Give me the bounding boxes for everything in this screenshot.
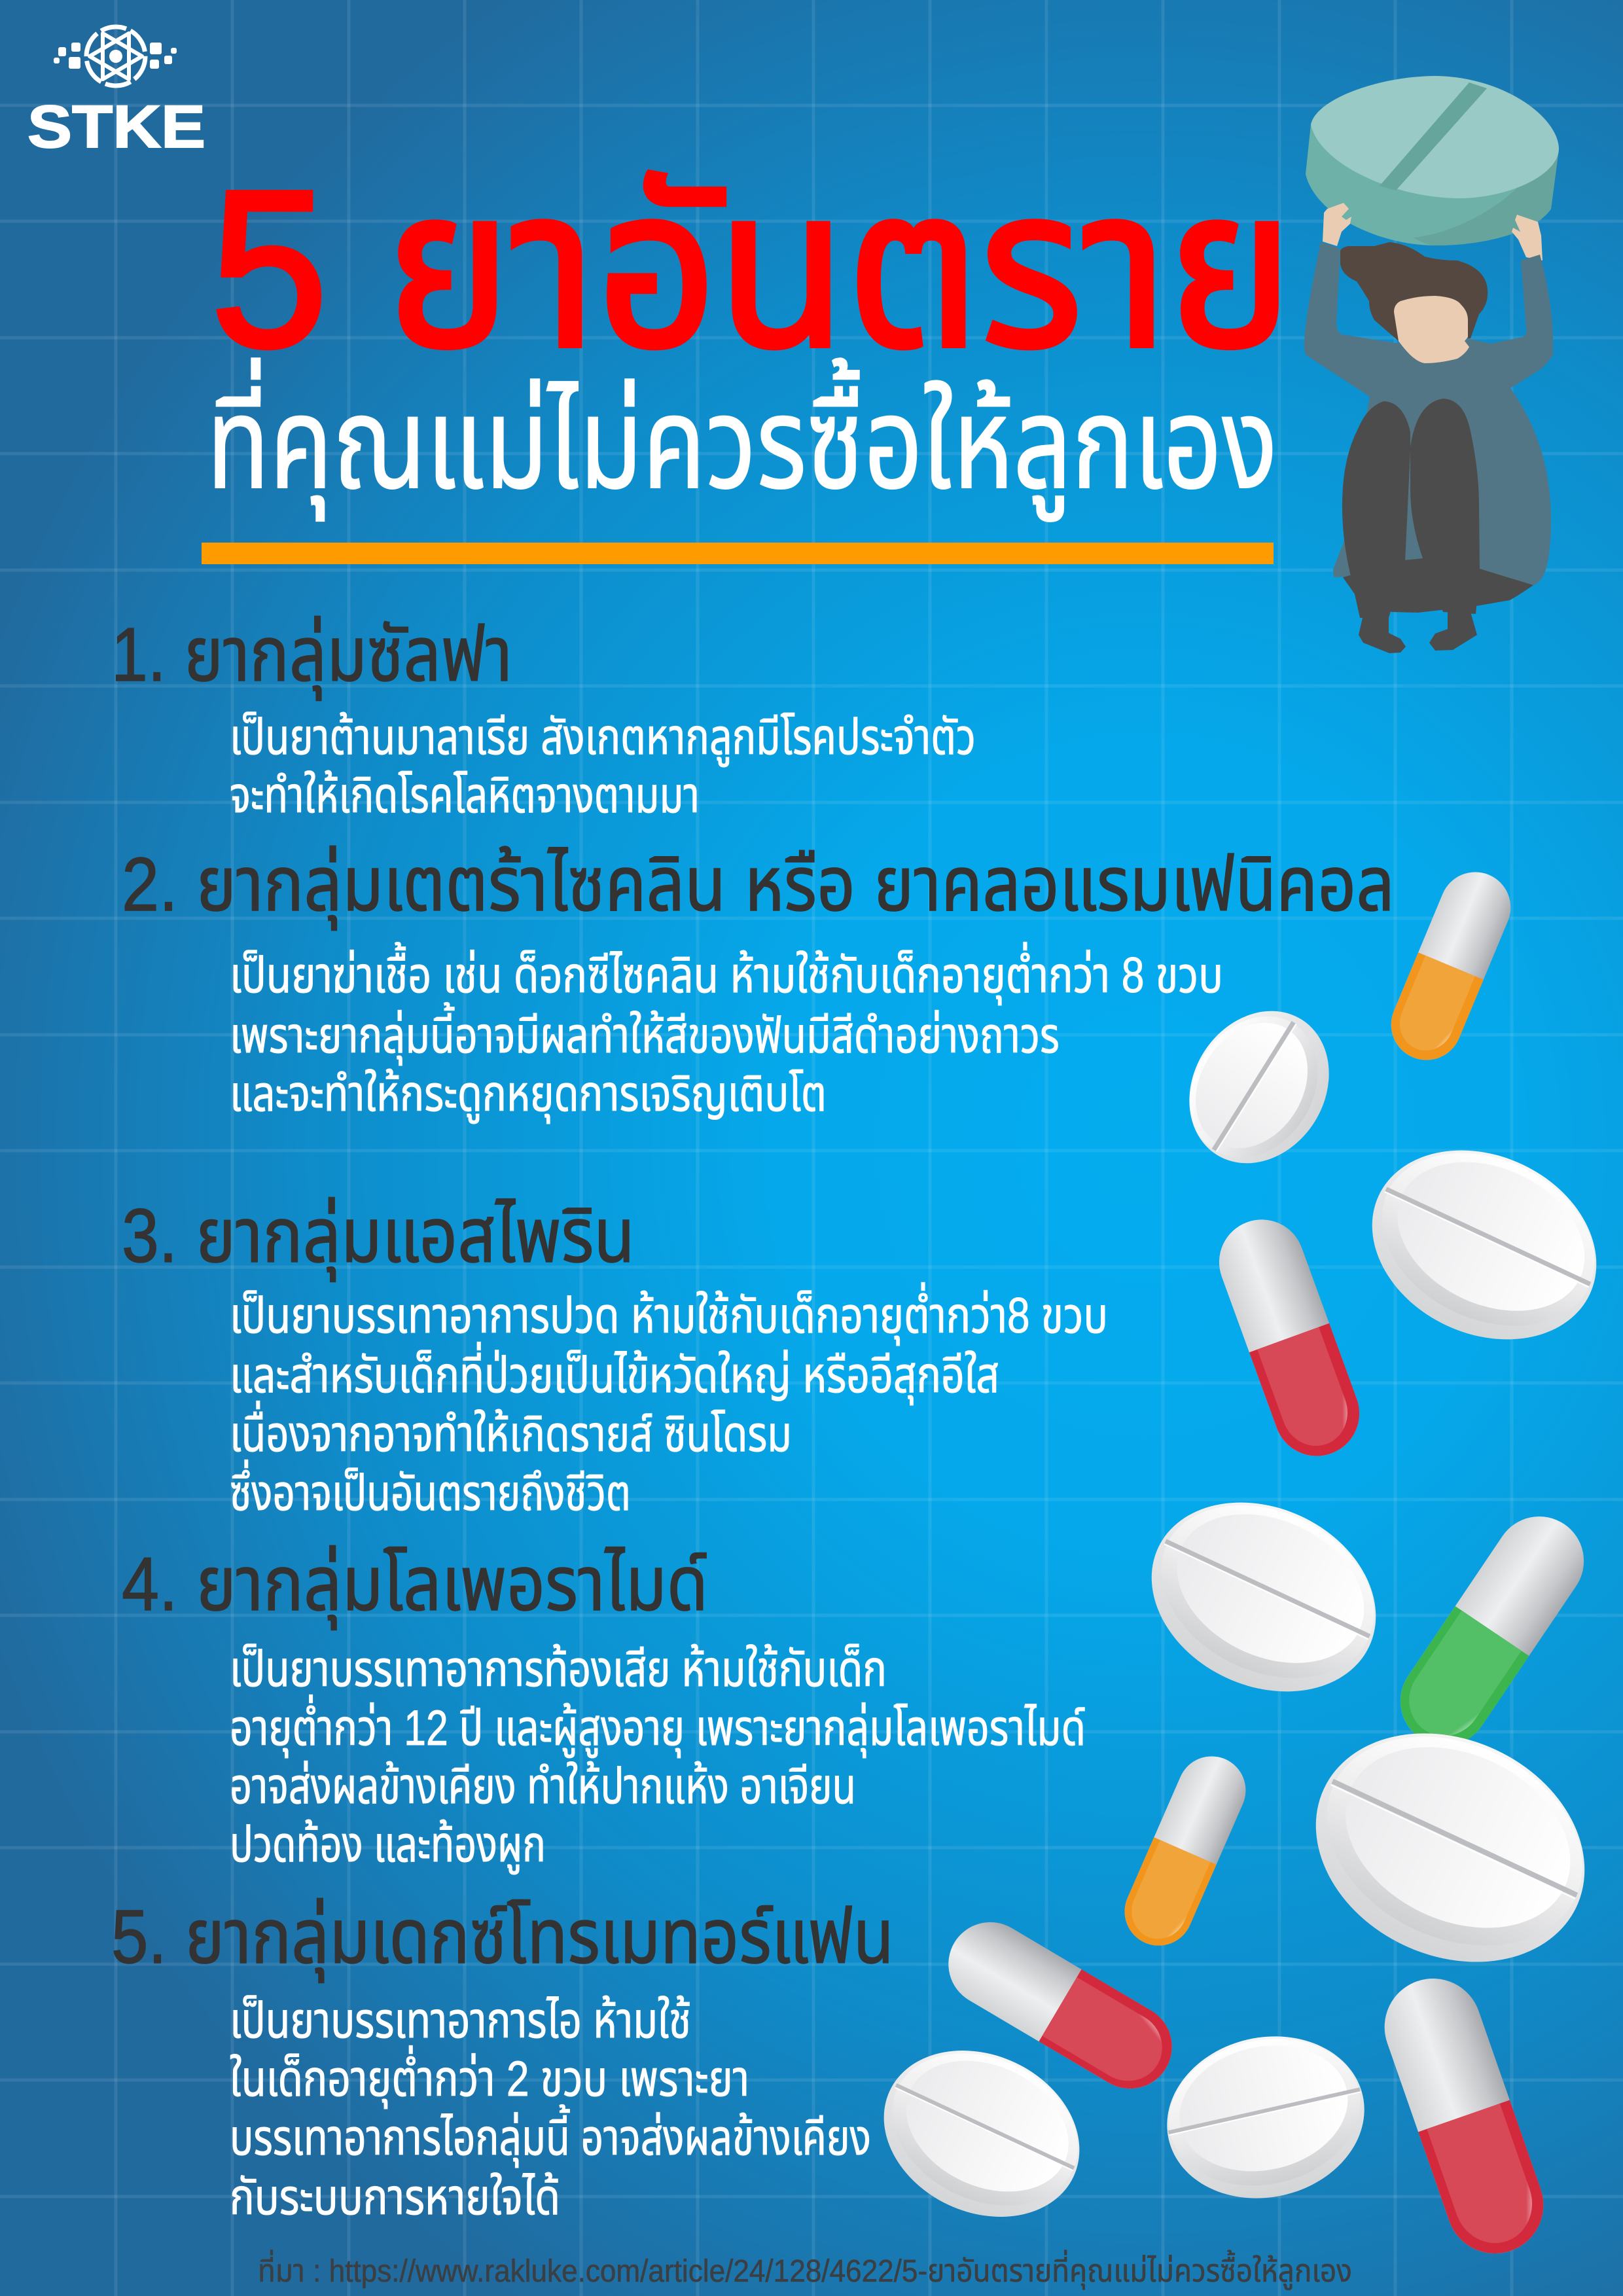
text block 1: จะทำให้เกิดโรคโลหิตจางตามมา (230, 768, 700, 823)
heading 5: 5. ยากลุ่มเดกซ์โทรเมทอร์แฟน (111, 1894, 894, 1982)
list item 4 (122, 1541, 1086, 1874)
text block 5 (230, 1993, 871, 2225)
source line: ที่มา : https://www.rakluke.com/article/24/128/4622/5-ยาอันตรายที่คุณแม่ไม่ควรซื้อให้ลูกเอง (258, 2250, 1352, 2290)
text block 4: เป็นยาบรรเทาอาการท้องเสีย ห้ามใช้กับเด็ก (230, 1641, 887, 1697)
tablet: middle (1120, 1467, 1407, 1727)
tablet: large upper right (1341, 1115, 1623, 1374)
text block 5: กับระบบการหายใจได้ (230, 2170, 560, 2225)
illustration: person lifting giant pill (1304, 76, 1559, 653)
capsule: red bottom right (1371, 1965, 1557, 2267)
hips (1343, 558, 1533, 613)
icon: giant pill (1306, 76, 1559, 245)
tablet: biggest (1278, 1691, 1622, 2005)
heading 3: 3. ยากลุ่มแอสไพริน (122, 1193, 635, 1282)
text block 3: และสำหรับเด็กที่ป่วยเป็นไข้หวัดใหญ่ หรืออีสุกอีใส (230, 1342, 999, 1405)
heading 4: 4. ยากลุ่มโลเพอราไมด์ (122, 1541, 708, 1630)
list item 2 (122, 842, 1395, 1124)
text block 4: ปวดท้อง และท้องผูก (230, 1817, 546, 1874)
text block 3 (230, 1282, 1108, 1521)
text block 5: เป็นยาบรรเทาอาการไอ ห้ามใช้ (230, 1993, 691, 2049)
logo: STKE (27, 27, 205, 160)
capsule: red lying (933, 1907, 1187, 2104)
text block 1: เป็นยาต้านมาลาเรีย สังเกตหากลูกมีโรคประจำตัว (230, 709, 976, 767)
text block 2: เป็นยาฆ่าเชื้อ เช่น ด็อกซีไซคลิน ห้ามใช้กับเด็กอายุต่ำกว่า 8 ขวบ (230, 942, 1223, 1005)
face (1394, 296, 1469, 363)
shoes (1359, 612, 1477, 653)
tablet: small (1162, 985, 1357, 1189)
left hand (1323, 203, 1351, 246)
text block 2: เพราะยากลุ่มนี้อาจมีผลทำให้สีของฟันมีสีดำอย่างถาวร (230, 1002, 1060, 1066)
heading 1: 1. ยากลุ่มซัลฟา (111, 612, 512, 700)
icon: atom (54, 27, 177, 86)
title: 5 ยาอันตราย (211, 145, 1293, 393)
right leg (1410, 399, 1480, 614)
heading 2: 2. ยากลุ่มเตตร้าไซคลิน หรือ ยาคลอแรมเฟนิคอล (122, 842, 1395, 930)
text block 4: อายุต่ำกว่า 12 ปี และผู้สูงอายุ เพราะยากลุ่มโลเพอราไมด์ (230, 1695, 1086, 1758)
capsule: green (1383, 1499, 1601, 1763)
right hand (1512, 215, 1543, 260)
logo wordmark: STKE (27, 94, 205, 160)
capsule: orange top (1380, 861, 1522, 1071)
coat (1304, 242, 1553, 585)
capsule: red middle (1207, 1208, 1371, 1468)
list item 1 (111, 612, 976, 823)
hair (1340, 242, 1488, 341)
text block 5: ในเด็กอายุต่ำกว่า 2 ขวบ เพราะยา (230, 2045, 749, 2109)
text block 1 (230, 709, 976, 823)
text block 3: ซึ่งอาจเป็นอันตรายถึงชีวิต (230, 1460, 631, 1521)
orange divider bar (202, 543, 1274, 564)
text block 4: อาจส่งผลข้างเคียง ทำให้ปากแห้ง อาเจียน (230, 1759, 856, 1814)
tablet: bottom centre (1151, 2018, 1380, 2217)
text block 2: และจะทำให้กระดูกหยุดการเจริญเติบโต (230, 1066, 827, 1124)
text block 2 (230, 942, 1223, 1124)
list item 5 (111, 1894, 894, 2225)
left leg (1342, 401, 1410, 618)
tablet: bottom left (857, 2020, 1107, 2248)
list item 3 (122, 1193, 1108, 1521)
text block 4 (230, 1641, 1086, 1874)
text block 3: เป็นยาบรรเทาอาการปวด ห้ามใช้กับเด็กอายุต่ำกว่า8 ขวบ (230, 1282, 1108, 1346)
text block 3: เนื่องจากอาจทำให้เกิดรายส์ ซินโดรม (230, 1401, 792, 1462)
subtitle: ที่คุณแม่ไม่ควรซื้อให้ลูกเอง (207, 358, 1277, 522)
capsule: orange small (1114, 1746, 1257, 1956)
text block 5: บรรเทาอาการไอกลุ่มนี้ อาจส่งผลข้างเคียง (230, 2104, 871, 2168)
